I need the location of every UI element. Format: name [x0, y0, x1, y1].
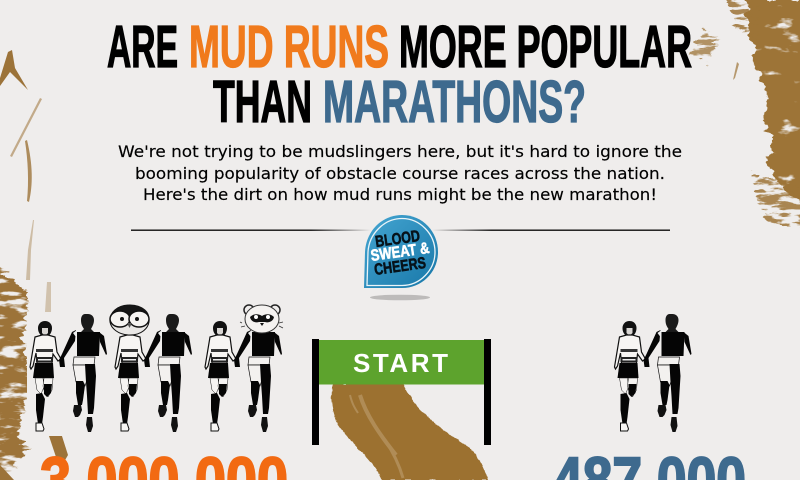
- logo: Blood Sweat & Cheers: BLOOD: [374, 228, 421, 251]
- mud splatter: top right: [692, 0, 800, 228]
- title: [107, 14, 692, 135]
- runners: mud runs: [27, 305, 289, 436]
- intro text: Here's the dirt on how mud runs might be the new marathon!: [143, 185, 657, 204]
- divider line: [131, 230, 670, 231]
- logo: Blood Sweat & Cheers: CHEERS: [373, 255, 427, 279]
- title: THAN: [213, 69, 312, 135]
- start banner: START: [353, 348, 448, 378]
- intro text: [118, 142, 682, 204]
- title: MARATHONS?: [323, 69, 586, 135]
- logo: Blood Sweat & Cheers: [364, 215, 438, 300]
- runner pair 2 with owl head: [115, 314, 192, 432]
- runners: marathons: [614, 314, 692, 432]
- runner pair 3 with raccoon head: [205, 321, 282, 432]
- icon: owl head: [110, 305, 149, 335]
- intro text: We're not trying to be mudslingers here, but it's hard to ignore the: [118, 142, 682, 161]
- mud brush stroke: centre: [331, 384, 488, 480]
- mud brush highlights: [350, 395, 403, 478]
- start banner: [312, 339, 491, 445]
- title: ARE: [107, 14, 178, 80]
- intro text: booming popularity of obstacle course races across the nation.: [135, 164, 665, 183]
- logo: Blood Sweat & Cheers: SWEAT &: [370, 240, 431, 265]
- mud splatter: left edge: [0, 50, 68, 480]
- title: MUD RUNS: [189, 14, 389, 80]
- icon: raccoon head: [240, 305, 283, 333]
- runner pair 1: [30, 314, 107, 432]
